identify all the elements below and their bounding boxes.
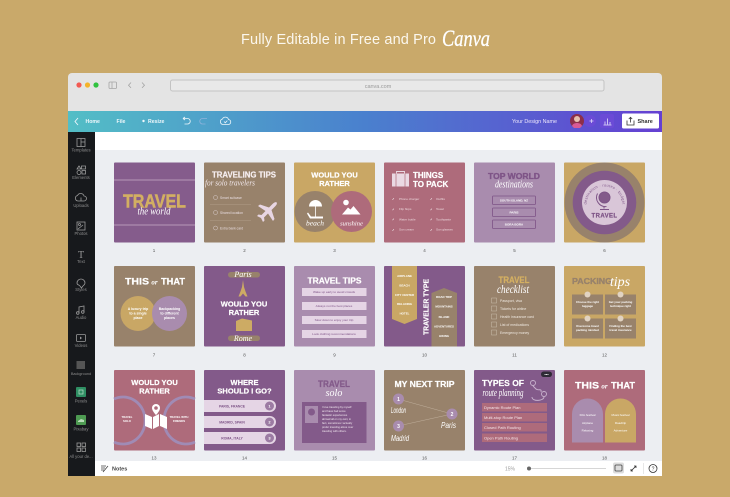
checklist: Health insurance card bbox=[500, 315, 534, 319]
packing list: ✓ bbox=[430, 197, 433, 201]
card 13: would you rather map bbox=[114, 370, 195, 450]
heading bbox=[413, 171, 448, 189]
arch: left: Airplane bbox=[582, 421, 593, 425]
sidebar: audio: Audio bbox=[76, 315, 87, 320]
heading: or bbox=[151, 278, 158, 286]
title: Canva bbox=[442, 26, 490, 51]
tip boxes bbox=[572, 294, 636, 338]
card 9: travel tips: Always not the best places bbox=[316, 304, 353, 308]
circle: beach: beach bbox=[306, 218, 324, 228]
toolbar right items: Your Design Name bbox=[512, 119, 557, 125]
heading: TOP WORLD bbox=[488, 171, 540, 181]
page numbers, bottom row: 14 bbox=[242, 456, 247, 460]
card 14: where should i go: 3 bbox=[268, 436, 271, 440]
destination pills bbox=[204, 400, 276, 444]
gold banner: BEACH bbox=[399, 284, 410, 288]
destination boxes bbox=[492, 196, 536, 228]
card 14: where should i go bbox=[204, 370, 285, 450]
card 16: my next trip: 2 bbox=[451, 412, 454, 418]
heading: TRAVEL bbox=[318, 379, 350, 389]
notes bbox=[101, 466, 127, 472]
card 14: where should i go: PARIS, FRANCE bbox=[219, 404, 246, 408]
card 16: my next trip: 1 bbox=[397, 397, 400, 403]
browser controls bbox=[109, 82, 144, 88]
sidebar: background bbox=[71, 361, 91, 376]
sidebar: photos bbox=[74, 222, 88, 236]
heading bbox=[217, 378, 272, 396]
heading: WOULD YOU bbox=[311, 170, 358, 180]
gold banner bbox=[392, 266, 417, 324]
heading: THINGS bbox=[413, 171, 444, 180]
label 9: 9 bbox=[333, 352, 336, 358]
arch: right: Adventure bbox=[614, 428, 628, 432]
card 1: travel the world bbox=[114, 162, 195, 242]
arch: right bbox=[605, 398, 636, 442]
page numbers, bottom row bbox=[151, 456, 607, 460]
heading: TRAVELING TIPS bbox=[212, 170, 277, 180]
card 10: traveler type bbox=[384, 266, 465, 346]
card 16: my next trip bbox=[384, 370, 465, 450]
sidebar: pixabay bbox=[74, 415, 89, 432]
icon: globe bbox=[597, 192, 610, 210]
story panel: fantastic experiences bbox=[322, 413, 348, 417]
page numbers, bottom row: 13 bbox=[151, 456, 157, 460]
traffic lights bbox=[76, 82, 99, 88]
title bbox=[241, 26, 490, 51]
label 4: 4 bbox=[423, 248, 426, 253]
card 7: this or that bbox=[114, 266, 195, 346]
packing list: ✓ bbox=[392, 228, 395, 232]
curved text: destination · routes · budget bbox=[584, 184, 625, 204]
card 17: types of route planning: Open Path Routing bbox=[484, 435, 518, 440]
checklist: Tickets for airline bbox=[500, 307, 526, 311]
heading: MY NEXT TRIP bbox=[394, 379, 455, 389]
checklist bbox=[210, 196, 251, 230]
checklist bbox=[492, 298, 534, 335]
heading: RATHER bbox=[139, 386, 170, 396]
editor toolbar bbox=[68, 111, 662, 132]
heading: SHOULD I GO? bbox=[217, 386, 272, 396]
heading: or bbox=[601, 382, 608, 390]
sidebar: videos: Videos bbox=[75, 343, 87, 348]
arch: right: Music festival bbox=[611, 413, 630, 417]
sidebar: audio bbox=[76, 306, 87, 320]
checklist: Passport, visa bbox=[500, 299, 522, 303]
story panel bbox=[302, 402, 366, 443]
card 8: paris or rome bbox=[204, 266, 285, 346]
arch: left: Film festival bbox=[580, 413, 596, 417]
more menu: ••• bbox=[544, 372, 549, 376]
taupe banner: ISLAND bbox=[439, 315, 449, 319]
circle: right option: to different bbox=[160, 312, 179, 316]
heading: PACKING bbox=[572, 276, 612, 286]
heading: WHERE bbox=[231, 378, 258, 387]
packing list: Flip flops bbox=[399, 207, 412, 211]
packing list: ✓ bbox=[392, 218, 395, 222]
tip bars bbox=[302, 288, 366, 338]
card 3: would you rather bbox=[294, 162, 375, 242]
label 1: 1 bbox=[153, 248, 156, 253]
heading: THAT bbox=[611, 380, 636, 390]
circle: sunshine: sunshine bbox=[340, 220, 363, 228]
arch: left bbox=[572, 398, 603, 442]
sidebar: all your designs bbox=[69, 443, 93, 459]
script: tips bbox=[610, 275, 631, 290]
packing list: Towel bbox=[436, 207, 444, 211]
card 5: top world destinations bbox=[474, 162, 555, 242]
packing list: Toothpaste bbox=[436, 217, 451, 221]
script: for solo travelers bbox=[205, 178, 255, 188]
packing list: Water bottle bbox=[399, 217, 416, 221]
place names bbox=[391, 406, 456, 443]
card 14: where should i go: 2 bbox=[268, 420, 271, 424]
arch: left: Relaxing bbox=[582, 428, 594, 432]
packing list: Phone charger bbox=[399, 197, 419, 201]
icon: suitcase bbox=[392, 172, 409, 186]
badge label: TRAVEL bbox=[592, 214, 617, 220]
script: solo bbox=[326, 388, 342, 399]
option labels: TRAVEL WITH bbox=[170, 415, 188, 419]
place names: London bbox=[391, 406, 406, 415]
card 6: travel badge bbox=[564, 162, 645, 242]
heading: WOULD YOU bbox=[131, 378, 178, 387]
heading: TYPES OF bbox=[482, 378, 524, 388]
sidebar: text bbox=[77, 250, 86, 264]
story panel: abroad all on my own; in bbox=[322, 417, 352, 421]
sidebar: styles: Styles bbox=[75, 287, 87, 292]
story panel: fact, sometimes I actually bbox=[322, 421, 353, 425]
page numbers, bottom row: 15 bbox=[332, 456, 337, 460]
route bbox=[398, 399, 452, 426]
rings bbox=[114, 397, 195, 444]
icon: plane bbox=[257, 202, 277, 222]
circle: left option: to a single bbox=[129, 312, 147, 316]
zoom slider: 15% bbox=[505, 466, 516, 472]
heading bbox=[131, 378, 178, 396]
label 11: 11 bbox=[512, 352, 517, 358]
sidebar: pexels bbox=[75, 387, 87, 404]
heading: THIS bbox=[575, 380, 599, 390]
label 2: 2 bbox=[243, 248, 246, 253]
canvas area bbox=[95, 132, 662, 150]
toolbar left items: File bbox=[116, 119, 126, 125]
card 14: where should i go: ROMA, ITALY bbox=[221, 436, 243, 440]
page numbers, bottom row: 17 bbox=[512, 456, 517, 460]
label 6: 6 bbox=[603, 248, 606, 253]
packing list: ✓ bbox=[392, 207, 395, 211]
script: checklist bbox=[497, 282, 530, 296]
script: route planning bbox=[482, 388, 524, 399]
sidebar: background: Background bbox=[71, 372, 91, 376]
card 17: types of route planning: Dynamic Route Plan bbox=[484, 405, 520, 410]
card 17: types of route planning: Multi-stop Route Plan bbox=[484, 415, 522, 420]
taupe banner: ROAD TRIP bbox=[436, 295, 452, 299]
icon: route bbox=[530, 380, 546, 400]
checklist: Smart suitcase bbox=[220, 196, 242, 200]
card 12: packing tips: Overcome travel bbox=[576, 324, 599, 328]
packing list: Outfits bbox=[436, 197, 445, 201]
heading: RATHER bbox=[229, 308, 260, 317]
label 8: 8 bbox=[243, 352, 246, 358]
top pill: Paris bbox=[233, 270, 252, 279]
option labels: SOLO bbox=[123, 419, 132, 423]
packing list: ✓ bbox=[430, 207, 433, 211]
circle: left option: A luxury trip bbox=[128, 307, 148, 311]
card 17: types of route planning bbox=[474, 370, 555, 450]
sidebar: photos: Photos bbox=[74, 231, 88, 236]
toolbar right items: Share bbox=[638, 119, 653, 125]
view buttons: ? bbox=[652, 466, 655, 472]
sidebar: all your designs: All your de... bbox=[69, 454, 93, 459]
gold banner: RELAXING bbox=[397, 302, 413, 306]
taupe banner bbox=[432, 288, 457, 346]
circle: right option bbox=[152, 296, 187, 331]
packing list: ✓ bbox=[430, 218, 433, 222]
packing list: ✓ bbox=[430, 228, 433, 232]
circle: right option: places bbox=[164, 316, 175, 320]
arch: right: Roadtrip bbox=[615, 421, 626, 425]
card 14: where should i go: MADRID, SPAIN bbox=[219, 420, 245, 424]
route bars bbox=[482, 403, 547, 442]
sidebar: pixabay: Pixabay bbox=[74, 426, 89, 432]
heading: THIS bbox=[125, 276, 149, 286]
icon: colosseum bbox=[236, 318, 252, 331]
sidebar: elements: Elements bbox=[72, 175, 90, 180]
taupe banner: ADVENTURES bbox=[434, 324, 454, 328]
card 12: packing tips: luggage bbox=[582, 304, 593, 308]
heading: TRAVEL bbox=[123, 190, 186, 212]
checklist: Extra bank card bbox=[220, 226, 243, 230]
card 12: packing tips: Choose the right bbox=[576, 300, 599, 304]
sidebar: templates: Templates bbox=[71, 148, 91, 152]
card 9: travel tips: Wake up early to avoid crowds bbox=[313, 290, 355, 294]
sidebar: templates bbox=[71, 138, 91, 152]
script: the world bbox=[138, 206, 171, 218]
card 4: things to pack bbox=[384, 162, 465, 242]
browser window bbox=[68, 73, 662, 476]
heading: THAT bbox=[161, 276, 186, 286]
icon: eiffel tower bbox=[238, 280, 248, 296]
packing list: Sun glasses bbox=[436, 228, 453, 232]
toolbar left items: Resize bbox=[148, 119, 165, 125]
sidebar: videos bbox=[75, 334, 87, 348]
packing list: ✓ bbox=[392, 197, 395, 201]
card 5: top world destinations: PARIS bbox=[510, 210, 518, 214]
gold banner: AIRPLANE bbox=[397, 274, 412, 278]
sidebar: text: T bbox=[78, 250, 84, 261]
heading bbox=[221, 300, 267, 317]
gold banner: HOTEL bbox=[400, 312, 410, 316]
story panel: I love traveling by myself bbox=[322, 405, 352, 409]
heading: TO PACK bbox=[413, 180, 448, 189]
card 14: where should i go: 1 bbox=[268, 404, 271, 408]
card 12: packing tips: packing mindset bbox=[576, 328, 599, 332]
address bar: canva.com bbox=[365, 84, 392, 90]
checklist: List of medications bbox=[500, 323, 529, 327]
label 5: 5 bbox=[513, 248, 516, 253]
heading bbox=[125, 276, 186, 286]
taupe banner: HIKING bbox=[439, 334, 450, 338]
card 9: travel tips: Slow down to enjoy your trip bbox=[315, 318, 354, 322]
checklist: Shared location bbox=[220, 211, 243, 215]
card 12: packing tips: travel insurance bbox=[609, 328, 632, 332]
circle: left option: place bbox=[134, 316, 143, 320]
card 18: this or that arches bbox=[564, 370, 645, 450]
label 7: 7 bbox=[153, 352, 156, 358]
rings bbox=[564, 162, 644, 242]
card 12: packing tips: Get your packing bbox=[609, 300, 633, 304]
card 9: travel tips: Look clothing recommendations bbox=[312, 332, 356, 336]
card 9: travel tips bbox=[294, 266, 375, 346]
option labels bbox=[122, 415, 188, 423]
card 11: travel checklist bbox=[474, 266, 555, 346]
card 15: travel solo bbox=[294, 370, 375, 450]
sidebar: uploads bbox=[73, 194, 89, 208]
notes: Notes bbox=[112, 466, 127, 472]
sidebar: styles bbox=[75, 279, 87, 292]
toolbar left items: Home bbox=[86, 119, 100, 125]
bottom pill: Rome bbox=[233, 334, 253, 343]
heading: TRAVEL bbox=[498, 275, 530, 285]
story panel: traveling with others. bbox=[322, 429, 347, 433]
sidebar: elements bbox=[72, 166, 90, 180]
heading: RATHER bbox=[319, 179, 350, 188]
sidebar: pexels: Pexels bbox=[75, 398, 87, 404]
card 17: types of route planning: Closed Path Routing bbox=[484, 425, 521, 430]
zoom slider bbox=[505, 466, 606, 472]
packing list: Sun cream bbox=[399, 228, 414, 232]
option labels: FRIENDS bbox=[173, 419, 185, 423]
story panel: prefer traveling alone over bbox=[322, 425, 353, 429]
packing list bbox=[392, 197, 453, 232]
place names: Madrid bbox=[391, 434, 409, 443]
story panel: and have had some bbox=[322, 409, 346, 413]
script: destinations bbox=[495, 180, 533, 190]
page numbers, bottom row: 18 bbox=[602, 456, 607, 460]
heading bbox=[575, 380, 636, 390]
address bar bbox=[170, 80, 604, 91]
label 3: 3 bbox=[333, 248, 336, 253]
card 12: packing tips: technique right bbox=[610, 304, 631, 308]
heading: WOULD YOU bbox=[221, 300, 267, 308]
toolbar right items bbox=[512, 114, 659, 128]
card 12: packing tips bbox=[564, 266, 645, 346]
vertical heading: TRAVELER TYPE bbox=[422, 279, 430, 335]
place names: Paris bbox=[441, 421, 456, 430]
icon: map and pin bbox=[145, 404, 167, 429]
label 10: 10 bbox=[422, 352, 427, 358]
card 12: packing tips: Finding the best bbox=[609, 324, 632, 328]
card 2: traveling tips bbox=[204, 162, 285, 242]
card 5: top world destinations: SOUTH ISLAND, NZ bbox=[500, 198, 528, 202]
heading: TRAVEL TIPS bbox=[308, 276, 362, 286]
card 5: top world destinations: BORA BORA bbox=[505, 222, 524, 226]
circle: left option bbox=[120, 296, 156, 331]
checklist: Emergency money bbox=[500, 331, 529, 335]
card 16: my next trip: 3 bbox=[397, 424, 400, 430]
left sidebar bbox=[68, 132, 95, 476]
sidebar: text: Text bbox=[77, 259, 86, 264]
label 12: 12 bbox=[602, 352, 607, 358]
view buttons bbox=[613, 462, 657, 474]
toolbar left items bbox=[75, 117, 231, 125]
gold banner: CITY CENTER bbox=[395, 293, 415, 297]
page numbers, bottom row: 16 bbox=[422, 456, 427, 460]
bottom bar bbox=[95, 461, 662, 476]
circle: right option: Backpacking bbox=[159, 307, 180, 311]
title: Fully Editable in Free and Pro bbox=[241, 32, 436, 48]
heading bbox=[311, 170, 358, 188]
taupe banner: MOUNTAINS bbox=[435, 304, 453, 308]
option labels: TRAVEL bbox=[122, 415, 133, 419]
sidebar: uploads: Uploads bbox=[73, 203, 89, 208]
